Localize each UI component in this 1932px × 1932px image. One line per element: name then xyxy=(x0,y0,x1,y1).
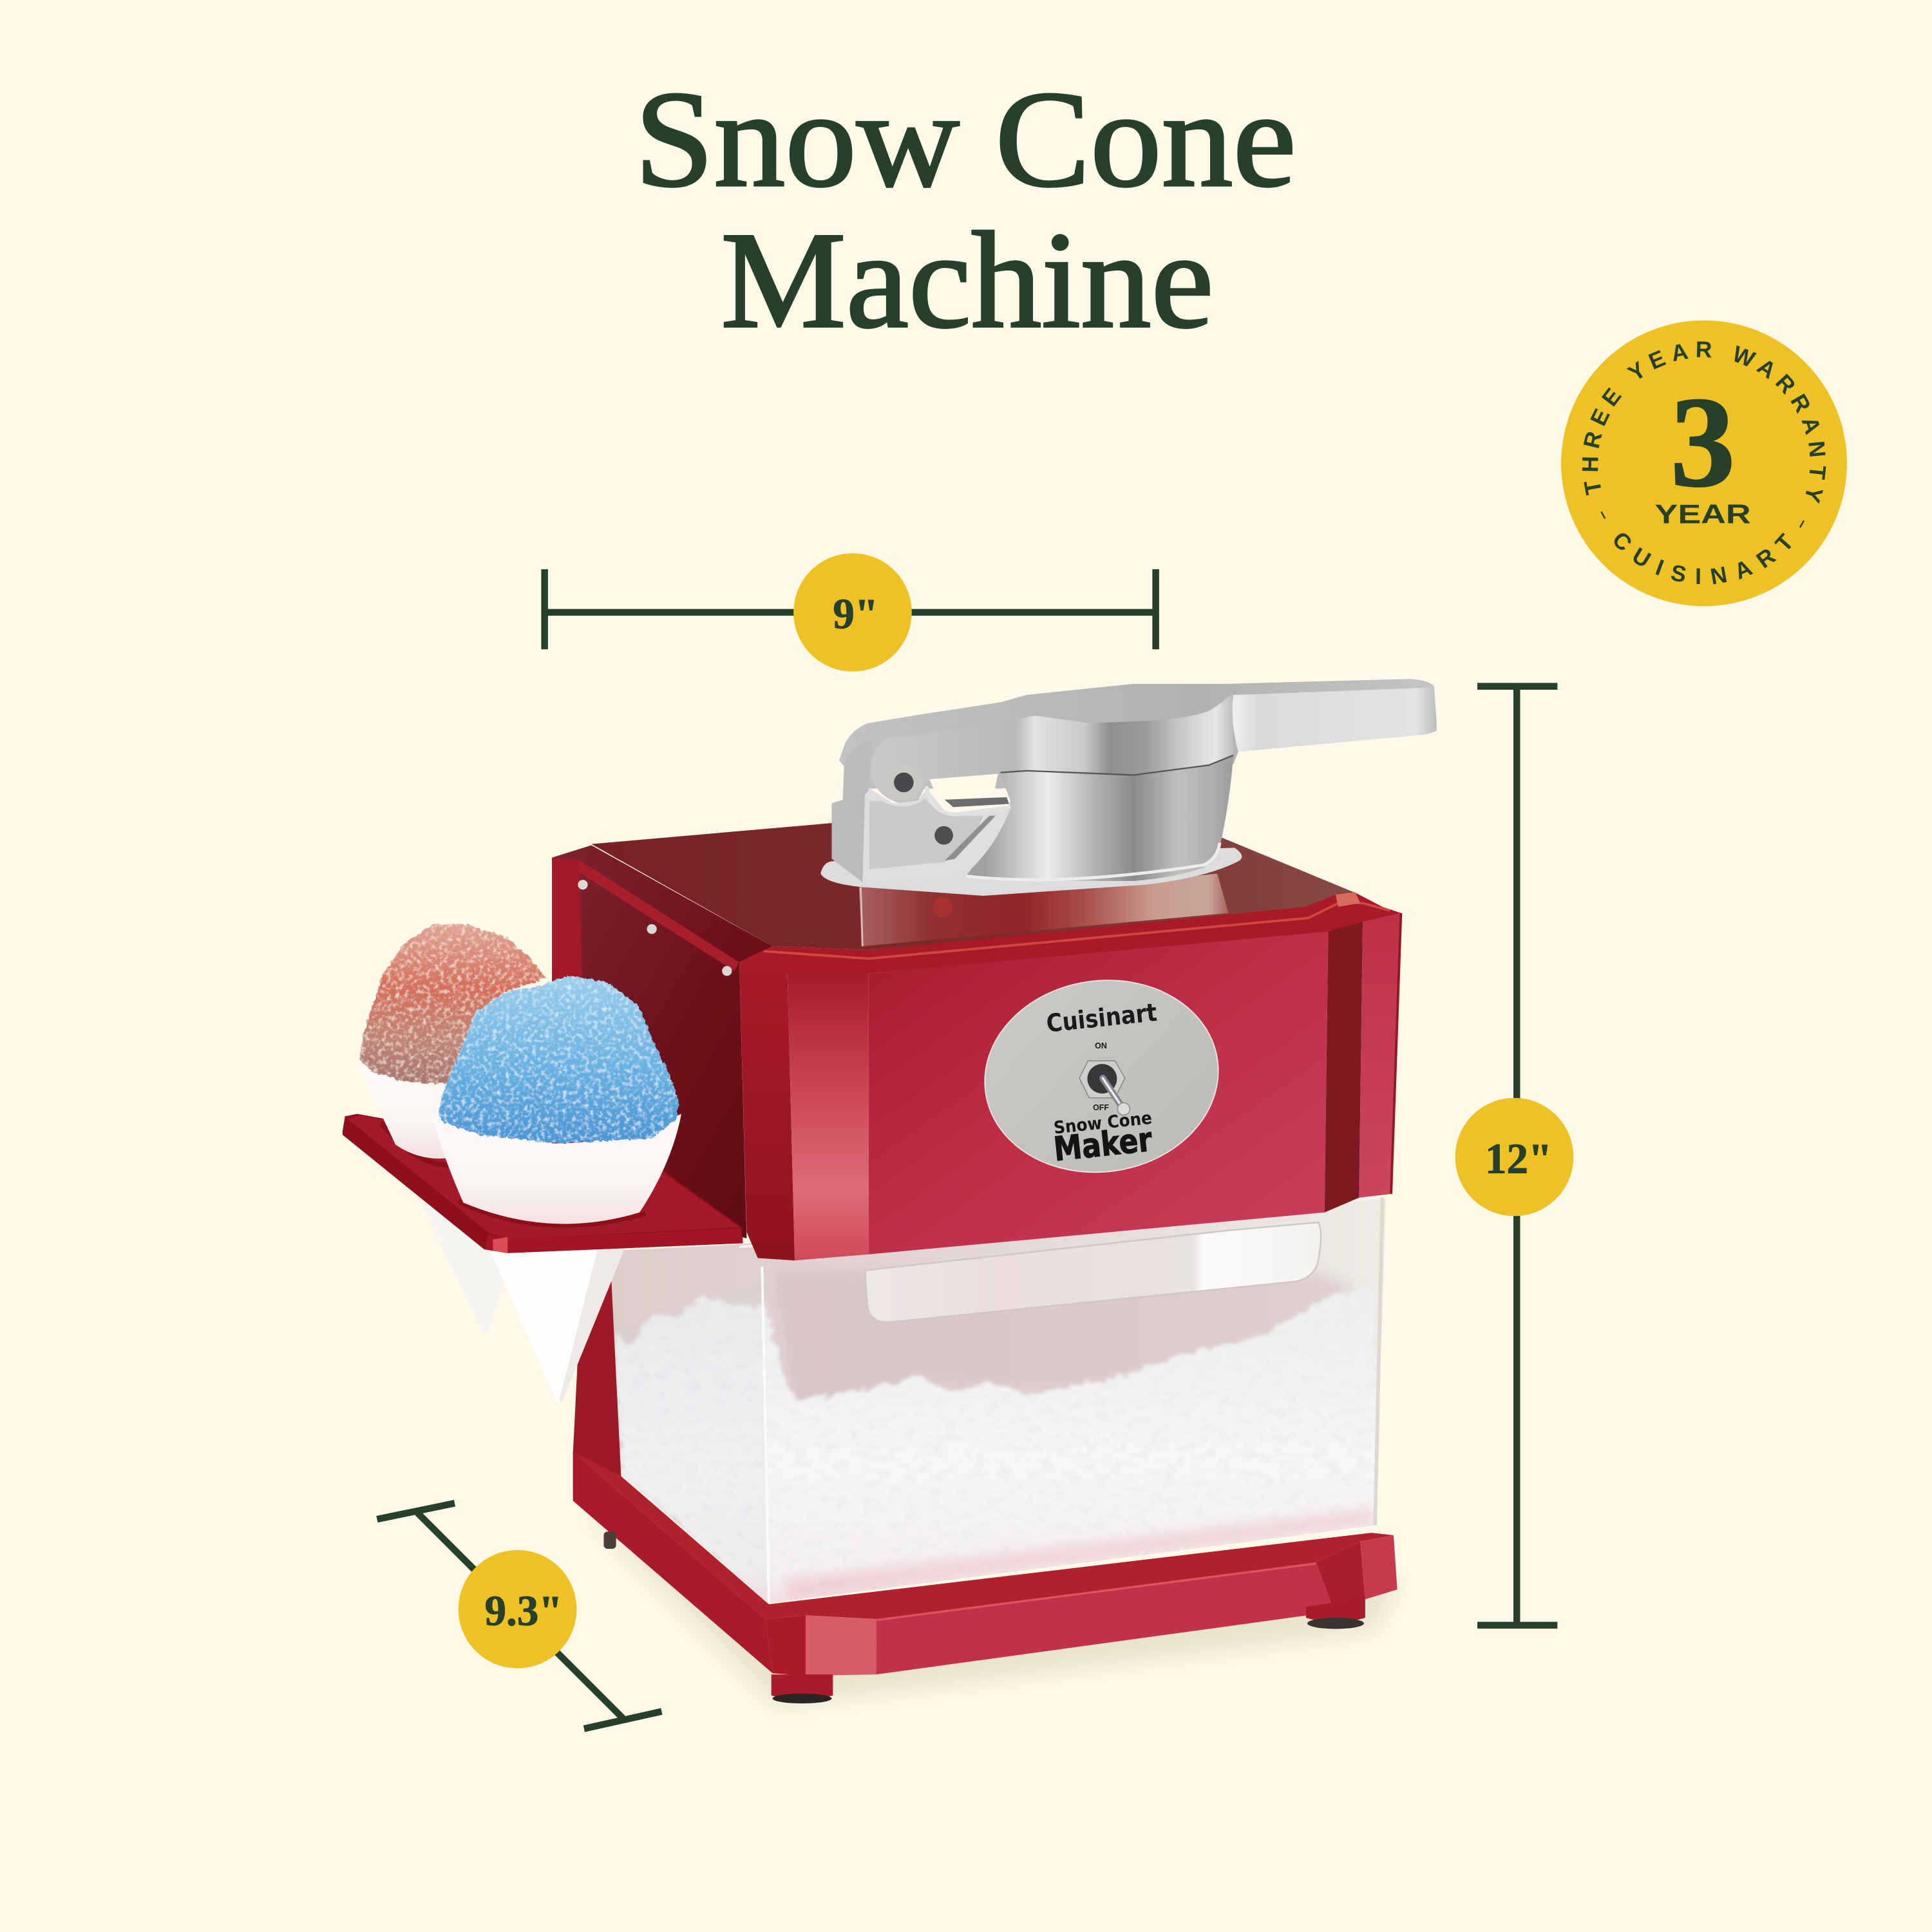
chute window xyxy=(865,1222,1321,1322)
hopper back silhouette xyxy=(839,679,1437,788)
dimension: depth 9.3 inches xyxy=(377,1503,661,1728)
title: Machine xyxy=(721,204,1214,357)
paper cones xyxy=(421,1204,625,1403)
warranty badge: YEAR xyxy=(1655,499,1751,529)
warranty badge xyxy=(1561,321,1847,607)
title: Snow Cone xyxy=(634,63,1296,216)
lid top xyxy=(591,823,1357,950)
screws xyxy=(886,764,922,801)
lid rim xyxy=(739,893,1401,973)
dimension: width 9 inches xyxy=(545,553,1156,672)
floor shadow xyxy=(579,1510,1405,1707)
cup tray xyxy=(343,1114,743,1253)
title xyxy=(634,63,1296,357)
dimension: height 12 inches xyxy=(1455,687,1573,1625)
red cup xyxy=(356,1061,451,1159)
control plate: Cuisinart xyxy=(1045,998,1159,1039)
bracket window xyxy=(929,774,998,799)
hopper cylinder xyxy=(966,757,1233,881)
warranty badge: – xyxy=(1791,515,1812,532)
dimension: depth 9.3 inches: 9.3" xyxy=(485,1587,563,1635)
warranty badge: THREE YEAR WARRANTY xyxy=(1582,341,1826,504)
feet xyxy=(604,1531,1365,1703)
hopper arm xyxy=(871,694,1233,804)
warranty badge: 3 xyxy=(1671,371,1735,514)
blue cup xyxy=(431,1114,681,1224)
front panel xyxy=(739,913,1401,1260)
dimension: height 12 inches: 12" xyxy=(1485,1135,1552,1182)
control plate xyxy=(972,965,1231,1187)
product: snow cone machine xyxy=(343,679,1437,1707)
side panel xyxy=(552,845,773,1238)
control plate: ON xyxy=(1095,1041,1107,1050)
dimension: width 9 inches: 9" xyxy=(833,591,878,638)
clear ice bin xyxy=(610,1198,1386,1608)
shaved ice xyxy=(614,1285,1386,1608)
control plate: OFF xyxy=(1093,1103,1109,1112)
warranty badge: – xyxy=(1594,507,1614,523)
blue shaved ice xyxy=(439,976,679,1144)
rear red column xyxy=(573,1282,622,1479)
warranty badge: CUISINART xyxy=(1614,533,1792,585)
control plate: Snow Cone xyxy=(1053,1108,1153,1138)
handle grip xyxy=(1232,688,1437,752)
lid corner highlight xyxy=(1336,892,1360,907)
hopper bracket xyxy=(831,739,873,882)
control plate: Maker xyxy=(1052,1121,1154,1169)
pink haze behind ice xyxy=(778,1270,1350,1399)
hopper and handle xyxy=(820,679,1437,896)
base xyxy=(573,1452,1397,1676)
red shaved ice xyxy=(360,924,546,1084)
hopper collar ring xyxy=(820,848,1242,896)
